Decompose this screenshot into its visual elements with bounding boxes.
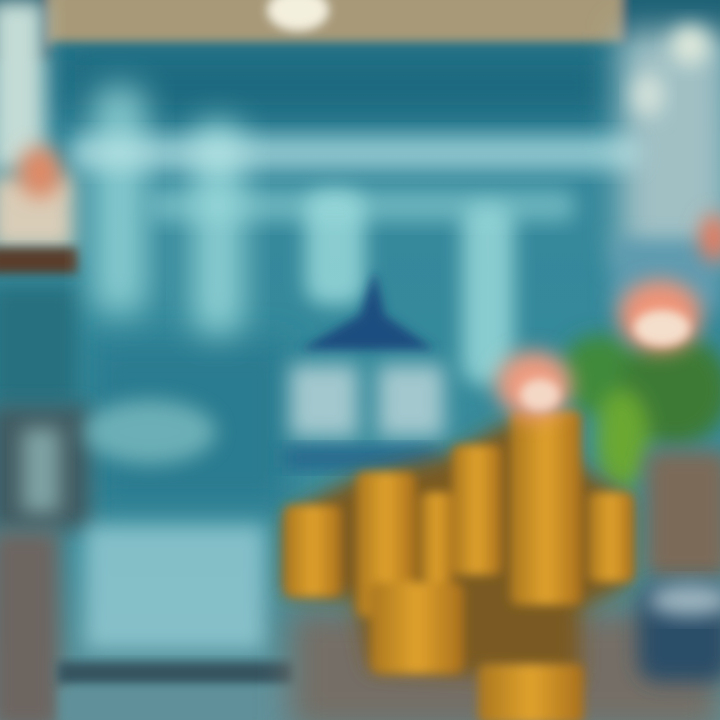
ceiling bbox=[0, 0, 720, 60]
small house icon bbox=[285, 270, 444, 468]
left wall and shelf bbox=[0, 0, 90, 720]
lower panel bbox=[58, 525, 293, 684]
flowers bbox=[496, 214, 720, 419]
blurred text and light columns bbox=[70, 85, 640, 385]
shadow behind coins bbox=[285, 420, 630, 680]
flower highlights bbox=[520, 310, 690, 411]
blurred cloud shape bbox=[84, 400, 216, 464]
floor bbox=[60, 610, 720, 720]
vase and bowl bbox=[638, 450, 720, 682]
stacks of coins bbox=[284, 410, 634, 720]
right wall bbox=[612, 25, 720, 310]
foliage bbox=[560, 335, 720, 490]
